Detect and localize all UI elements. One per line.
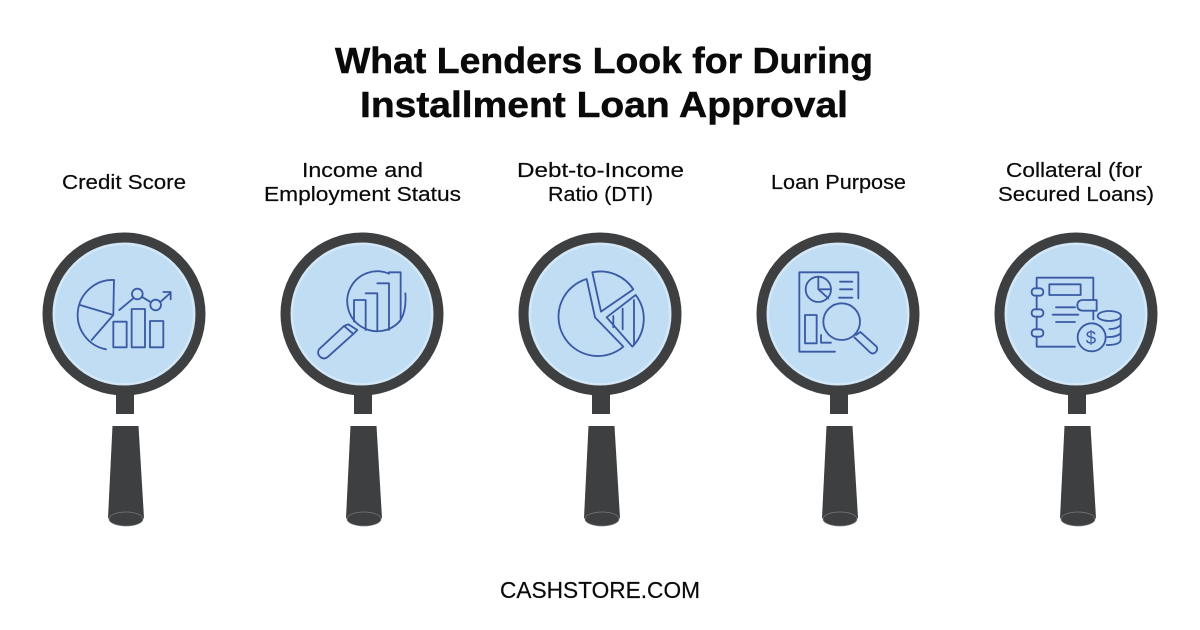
magnifying glass: income	[286, 238, 438, 526]
title	[335, 40, 873, 125]
icon: pie chart and rising bars	[78, 280, 171, 349]
panel: credit score	[48, 172, 200, 526]
panel: income and employment status	[264, 160, 461, 526]
magnifying glass: credit score	[48, 238, 200, 526]
heading: income and employment status: Income and	[302, 160, 423, 182]
icon: report with magnifier	[799, 272, 877, 354]
heading: debt-to-income ratio: Ratio (DTI)	[548, 184, 653, 206]
magnifying glass: debt-to-income	[524, 238, 676, 526]
footer: brand: CASHSTORE.COM	[500, 577, 700, 603]
icon: exploded pie chart	[559, 271, 644, 356]
icon: binder with coins: $	[1086, 327, 1097, 348]
panel: debt-to-income ratio	[517, 160, 684, 526]
heading: collateral for secured loans	[998, 160, 1154, 206]
icon: binder with coins	[1032, 278, 1121, 351]
heading: credit score: Credit Score	[62, 172, 186, 194]
panel: loan purpose	[762, 172, 914, 526]
heading: debt-to-income ratio: Debt-to-Income	[517, 160, 684, 182]
panel: collateral	[998, 160, 1154, 526]
magnifying glass: loan purpose	[762, 238, 914, 526]
heading: loan purpose: Loan Purpose	[771, 172, 906, 194]
icon: magnifier over bar chart	[318, 271, 406, 359]
heading: income and employment status	[264, 160, 461, 206]
heading: income and employment status: Employment Status	[264, 184, 461, 206]
title: Installment Loan Approval	[360, 84, 848, 125]
title: What Lenders Look for During	[335, 40, 873, 81]
heading: collateral for secured loans: Collateral (for	[1006, 160, 1142, 182]
heading: debt-to-income ratio	[517, 160, 684, 206]
heading: collateral for secured loans: Secured Loans)	[998, 184, 1154, 206]
magnifying glass: collateral	[1000, 238, 1152, 526]
